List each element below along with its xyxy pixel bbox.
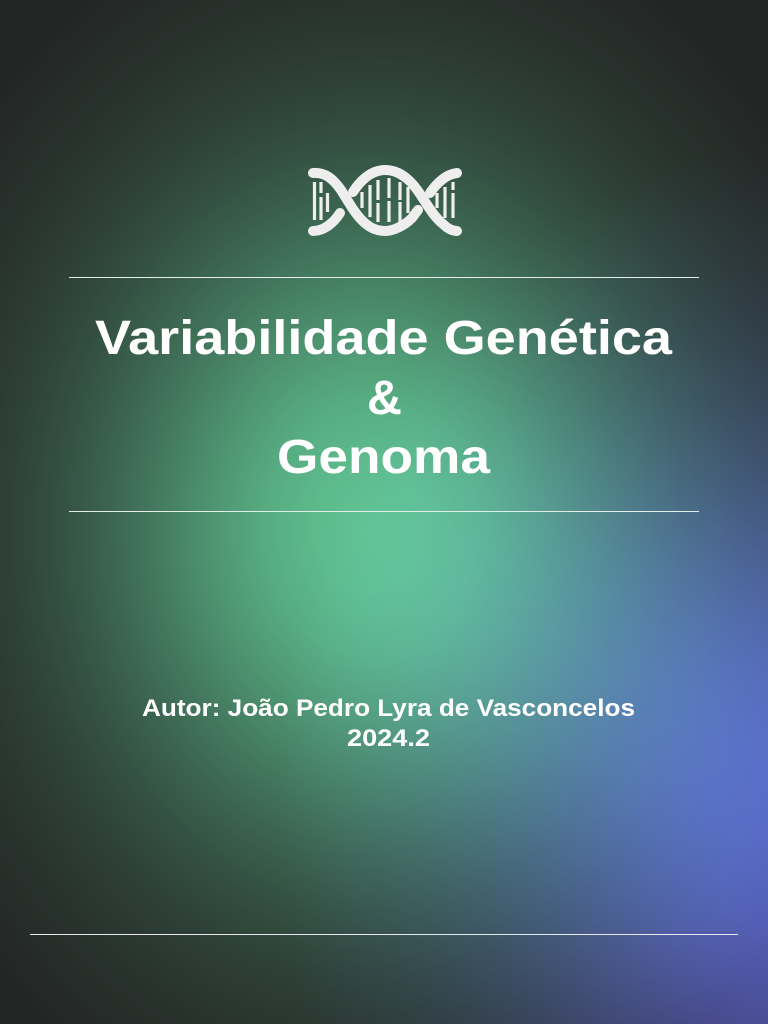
top divider <box>69 276 699 278</box>
footer divider <box>30 934 738 936</box>
bottom title divider <box>69 510 699 512</box>
author and date: Autor: João Pedro Lyra de Vasconcelos <box>142 695 635 722</box>
author and date: 2024.2 <box>347 725 430 752</box>
title: & <box>367 372 402 425</box>
icon: DNA helix <box>313 170 457 231</box>
author and date <box>142 695 635 752</box>
title: Variabilidade Genética <box>95 312 672 365</box>
title <box>95 312 672 484</box>
title: Genoma <box>277 431 490 484</box>
